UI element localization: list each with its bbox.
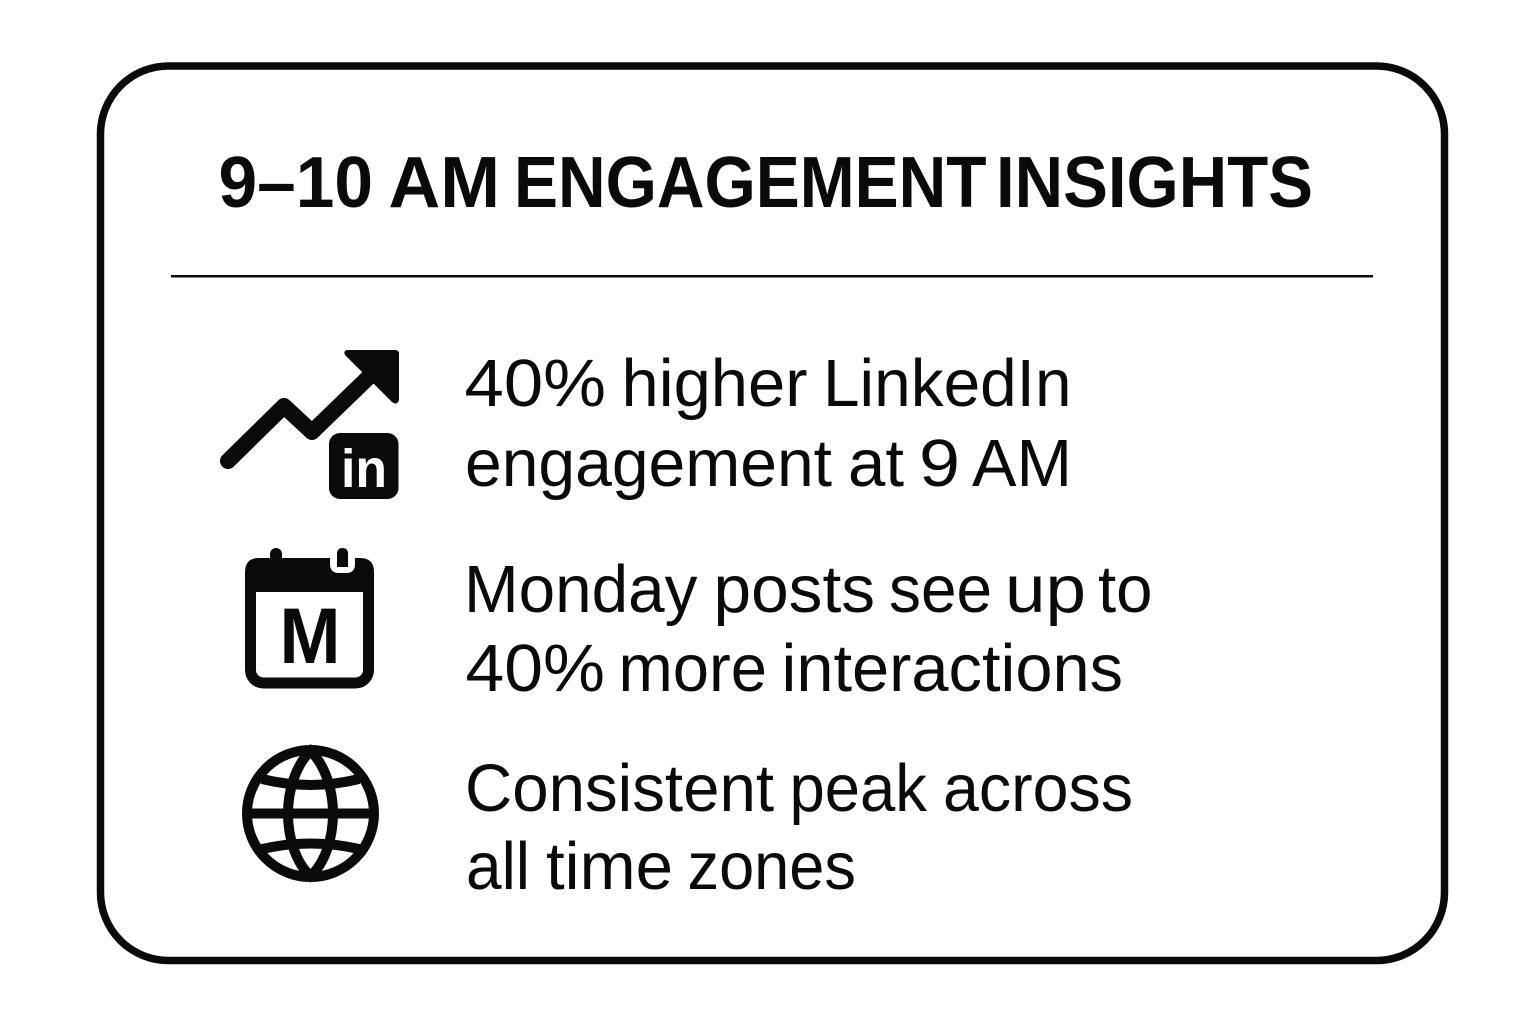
text: Monday posts xyxy=(464,552,1152,706)
text: time zones: all xyxy=(466,829,530,904)
text: time zones: zones xyxy=(688,829,856,904)
text: time zones: peak xyxy=(790,751,927,826)
text: Monday posts: up xyxy=(1005,552,1086,627)
icon: calendar with M xyxy=(245,548,374,683)
text: LinkedIn engagement xyxy=(464,346,1072,501)
text: time zones: Consistent xyxy=(465,751,774,826)
text: Monday posts: see xyxy=(889,552,992,627)
title: AM xyxy=(388,143,500,223)
panel: outer rounded card xyxy=(100,66,1444,960)
text: Monday posts: Monday xyxy=(464,552,698,627)
text: time zones: across xyxy=(943,751,1133,826)
text: LinkedIn engagement: 9 xyxy=(919,426,960,501)
icon: LinkedIn badge xyxy=(329,433,398,499)
text: LinkedIn engagement: AM xyxy=(972,426,1072,501)
title: 9–10 xyxy=(218,143,373,223)
icon: rising arrow with LinkedIn badge xyxy=(228,350,399,499)
text: LinkedIn engagement: higher xyxy=(622,346,808,421)
title: INSIGHTS xyxy=(996,143,1313,223)
text: LinkedIn engagement: 40% xyxy=(464,346,606,421)
text: Monday posts: more xyxy=(618,631,767,706)
text: Monday posts: posts xyxy=(714,552,875,627)
icon: LinkedIn badge: in xyxy=(341,439,387,499)
text: LinkedIn engagement: engagement xyxy=(465,426,832,501)
text: LinkedIn engagement: at xyxy=(848,426,904,501)
text: Monday posts: interactions xyxy=(782,631,1123,706)
text: time zones xyxy=(465,751,1133,904)
icon: rising trend arrow xyxy=(228,350,399,461)
text: time zones: time xyxy=(546,829,673,904)
icon: calendar with M: M xyxy=(280,591,340,680)
text: Monday posts: to xyxy=(1098,552,1152,627)
icon: globe xyxy=(247,750,374,877)
title xyxy=(218,143,1313,223)
text: LinkedIn engagement: LinkedIn xyxy=(823,346,1072,421)
text: Monday posts: 40% xyxy=(466,631,605,706)
title: ENGAGEMENT xyxy=(514,143,987,223)
